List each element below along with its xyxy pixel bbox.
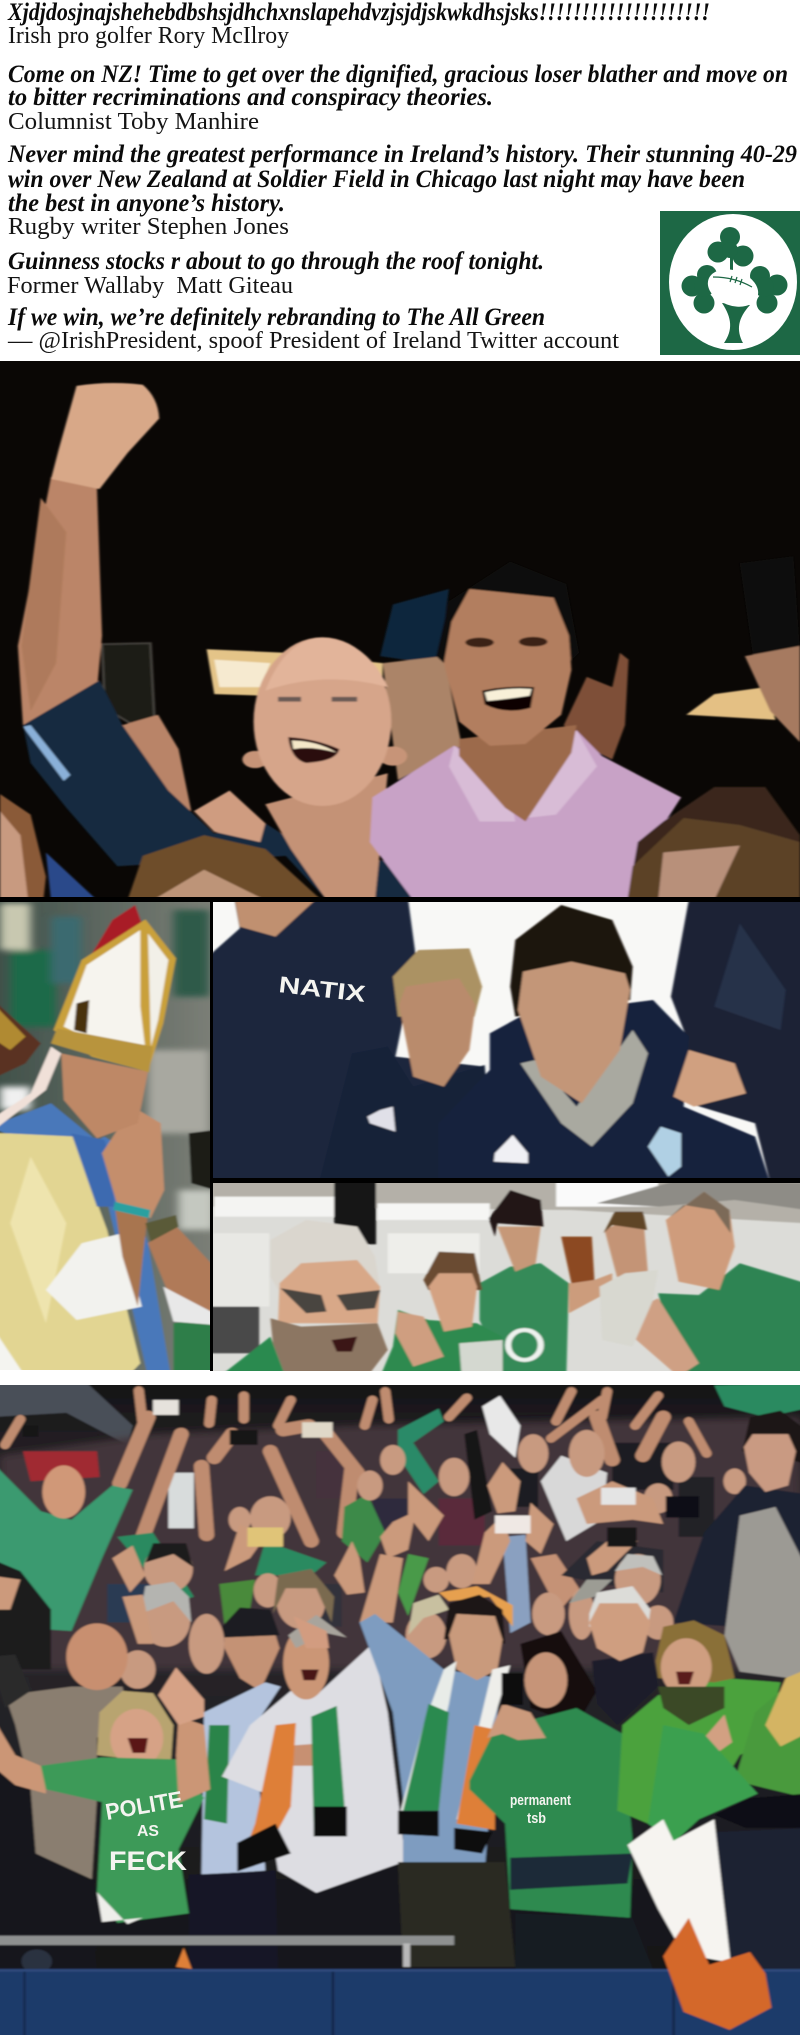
black dividers between photos [0,897,800,1371]
quote: Matt Giteau [7,248,544,299]
T-shirt slogan: AS [137,1823,159,1840]
sponsor lettering on jersey: permanent [510,1792,571,1809]
quote: Toby Manhire [8,61,788,135]
bearded man [219,1220,388,1377]
quote: Toby Manhire: to bitter recriminations and conspiracy theories. [8,84,493,111]
green shirt man left [0,1460,133,1670]
blurred crowd background [0,903,214,1230]
man far right [658,1192,800,1377]
woman with phone in green top [469,1631,653,1969]
raised right arm [146,1227,210,1312]
vestment [0,1133,140,1377]
white sleeve [46,1233,142,1320]
quote: Rory McIlroy: Irish pro golfer Rory McIlroy [8,23,289,49]
crowd heads [120,1430,746,1689]
hand behind sleeve [122,715,191,811]
bald man [242,637,407,900]
praying hands [102,1107,164,1218]
navy padded wall [0,1969,800,2037]
man top right in jacket [673,1411,800,1680]
person in cap [380,589,462,780]
man with quiff [380,1252,503,1377]
hair and dark tops of crowd heads [140,1543,662,1635]
raised arm with fist [18,383,159,725]
Irish tricolour flag [628,1725,771,2030]
phones held up [23,1400,699,1547]
rail [0,1936,454,1973]
man behind glass [605,1212,648,1278]
forearm [115,1207,148,1307]
raised hands mid row [112,1462,663,1644]
back row crowd tone [0,1417,800,1670]
dark-haired man [439,905,770,1183]
foreground heads bottom right [628,787,800,900]
dark figure right [188,1130,210,1190]
raised hand [234,902,316,938]
navy shirt [23,680,421,900]
quote: Stephen Jones: win over New Zealand at Soldier Field in Chicago last night may have been [8,166,745,193]
white sleeve right [163,1287,214,1325]
quote: Toby Manhire: Columnist Toby Manhire [8,109,259,135]
sponsor lettering on jersey [510,1792,571,1827]
pink shirt man [370,561,681,900]
photo: fan dressed as bishop [0,897,219,1377]
photo: cheering men in stadium stand [0,361,800,900]
blue stole [0,1103,171,1377]
old man in navy polo [589,1586,658,1725]
bar ceiling and windows [204,1180,800,1353]
quote: Stephen Jones: Rugby writer Stephen Jones [8,214,289,240]
raised glasses and arm [459,1270,699,1377]
T-shirt slogan: POLITE [103,1786,185,1825]
bald man in grey shirt [0,1575,128,1969]
hand on shoulder [194,790,265,842]
photo: two rugby players selfie [204,897,800,1183]
quote: Rory McIlroy [7,0,710,49]
man in denim shirt [360,1586,515,1967]
quote: Matt Giteau: Former Wallaby Matt Giteau [7,273,293,299]
stadium lights [207,649,776,720]
sponsor lettering on jersey: tsb [527,1810,546,1827]
mitre [51,905,176,1072]
old man pointing with white shirt [189,1615,403,1969]
hand on shoulder [673,1050,746,1107]
photo: fans drinking in a bar [204,1180,800,1377]
back row sleeves and bag [23,1383,800,1633]
quote: IrishPresident: If we win, we’re definitely rebranding to The All Green [7,304,545,331]
mitre side cape [0,1047,61,1133]
hand behind [564,653,629,760]
T-shirt slogan [103,1786,188,1876]
icon: Irish rugby shamrock logo [660,211,800,355]
quote: Matt Giteau: Guinness stocks r about to go through the roof tonight. [8,248,544,275]
quotes text block [7,0,797,354]
face [61,1053,148,1138]
right dark jacket [671,900,800,1183]
quote: IrishPresident [7,304,619,354]
foreground head bottom centre [128,835,321,900]
green coat woman [617,1620,781,1828]
right hand and phone [744,644,800,742]
woman in POLITE AS FECK T-shirt [0,1667,210,1924]
left jacket [204,900,485,1183]
T-shirt slogan: FECK [109,1846,188,1876]
jacket lettering: NATIX [277,971,368,1007]
clothing patches back rows [107,1443,714,1627]
quote: Stephen Jones [7,141,797,240]
quote: Stephen Jones: the best in anyone’s history. [8,190,285,217]
gold cape left [0,1006,41,1076]
tall man in green jersey [480,1190,612,1377]
photo: Irish fans celebrating in the crowd [0,1379,800,2038]
quote: IrishPresident: — @IrishPresident, spoof President of Ireland Twitter account [7,328,619,354]
stand structure [0,1383,133,1445]
green shirt bottom right [172,1322,210,1370]
blonde woman right [714,1670,800,1969]
man with glasses [202,1607,281,1875]
phone left [102,643,156,739]
foreground head bottom left [0,794,97,900]
blond man [366,948,488,1132]
raised arms back row [5,1391,707,1541]
